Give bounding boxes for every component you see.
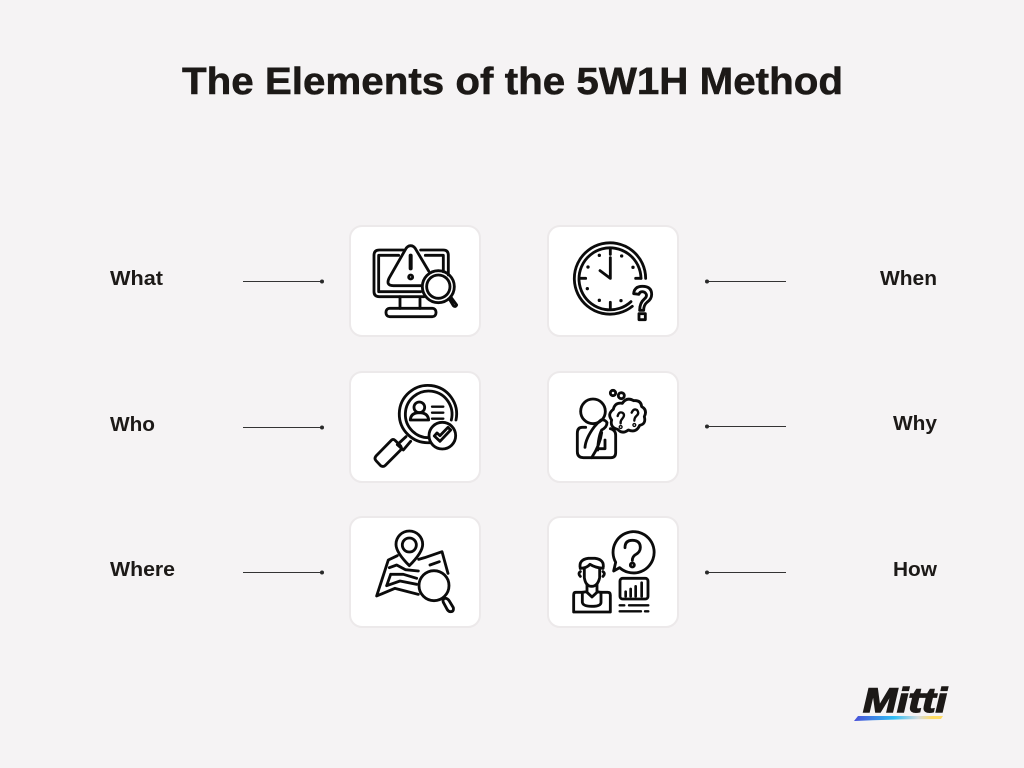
icon: clock with question mark <box>574 243 652 320</box>
connector: Who <box>243 426 324 430</box>
card: When <box>548 226 678 336</box>
label: What: What <box>110 267 163 290</box>
card: Who <box>350 372 480 482</box>
label: When: When <box>880 267 937 290</box>
icon: map with pin and magnifier <box>377 531 453 612</box>
card: How <box>548 517 678 627</box>
title: The Elements of the 5W1H Method <box>182 61 843 103</box>
card: Where <box>350 517 480 627</box>
connector: Where <box>243 570 324 574</box>
icon: monitor with warning and magnifier <box>374 246 457 317</box>
label: Why: Why <box>893 412 938 435</box>
label: Where: Where <box>110 558 175 581</box>
logo swoosh <box>854 716 943 721</box>
label: Who: Who <box>110 413 155 436</box>
connector: How <box>705 570 786 574</box>
card: What <box>350 226 480 336</box>
connector: Why <box>705 424 786 428</box>
icon: magnifier with profile and check <box>375 385 457 466</box>
icon: thinking person <box>577 390 646 458</box>
label: How: How <box>893 558 937 581</box>
card: Why <box>548 372 678 482</box>
connector: When <box>705 280 786 284</box>
connector: What <box>243 280 324 284</box>
logo: Mitti: Mitti <box>863 682 949 720</box>
icon: person with question bubble and chart <box>574 532 654 612</box>
